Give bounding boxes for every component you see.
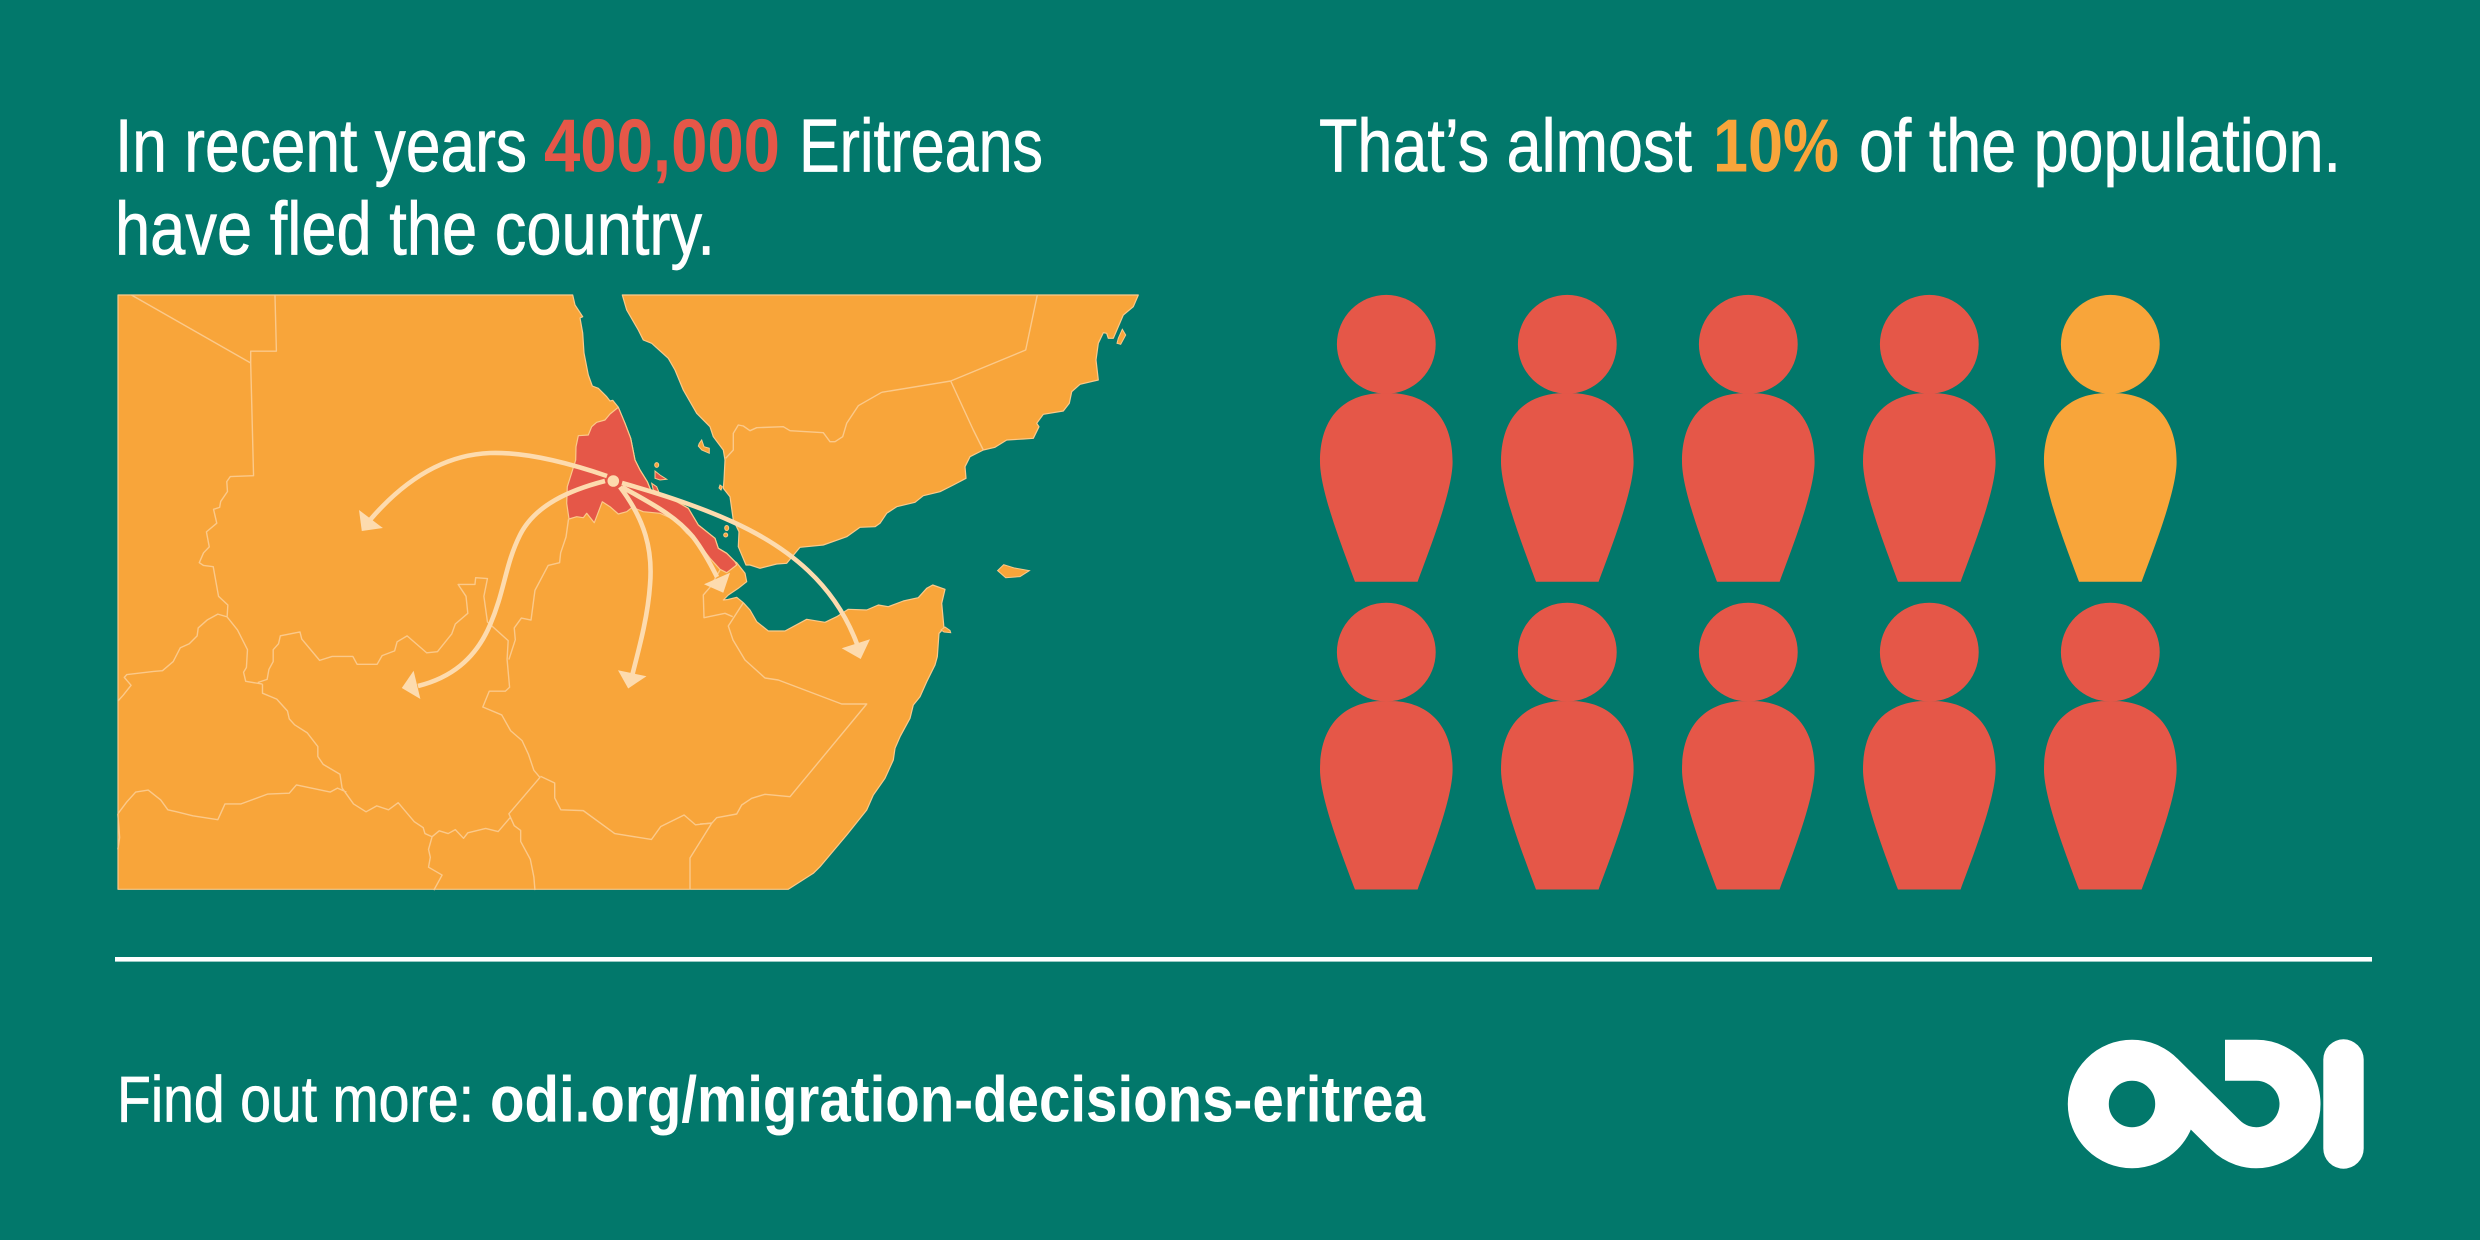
land: Africa: [118, 295, 945, 889]
heading: 400,000 Eritreans have fled: In recent years: [115, 104, 527, 188]
ODI logo: [2088, 1039, 2364, 1169]
person 9: [1863, 603, 1996, 890]
islands: [655, 329, 1126, 633]
person 10: [2044, 603, 2177, 890]
person 4: [1863, 295, 1996, 582]
person 8: [1682, 603, 1815, 890]
heading: almost 10% of the population: of the population.: [1859, 104, 2341, 188]
heading: 400,000 Eritreans have fled: Eritreans: [799, 104, 1043, 188]
footer link text: [117, 1063, 1426, 1136]
heading: almost 10% of the population: That’s almost: [1319, 104, 1692, 188]
footer link text: Find out more:: [117, 1063, 474, 1136]
heading: 400,000 Eritreans have fled: [115, 104, 1043, 270]
arrow: to Sudan: [359, 453, 607, 531]
country borders: [118, 295, 1037, 890]
arrow: to Ethiopia: [618, 487, 651, 688]
heading: almost 10% of the population: [1319, 104, 2341, 188]
person 3: [1682, 295, 1815, 582]
map of the Horn of Africa: [118, 295, 1138, 890]
person 2: [1501, 295, 1634, 582]
person 5: highlighted: [2044, 295, 2177, 582]
footer link text: odi.org/migration-decisions-eritrea: [490, 1063, 1426, 1136]
Eritrea: [567, 407, 737, 573]
land: Arabian peninsula: [622, 295, 1138, 568]
person 7: [1501, 603, 1634, 890]
arrow: to Djibouti: [622, 487, 730, 593]
person 1: [1320, 295, 1453, 582]
heading: 400,000 Eritreans have fled: have fled the country.: [115, 186, 715, 270]
arrow: to South Sudan: [402, 481, 605, 699]
pictogram: ten people, one in ten highlighted: [1320, 295, 2177, 889]
heading: almost 10% of the population: 10%: [1713, 104, 1839, 188]
arrow: to Somalia: [622, 483, 870, 659]
heading: 400,000 Eritreans have fled: 400,000: [544, 104, 780, 188]
origin dot: [608, 475, 619, 487]
person 6: [1320, 603, 1453, 890]
